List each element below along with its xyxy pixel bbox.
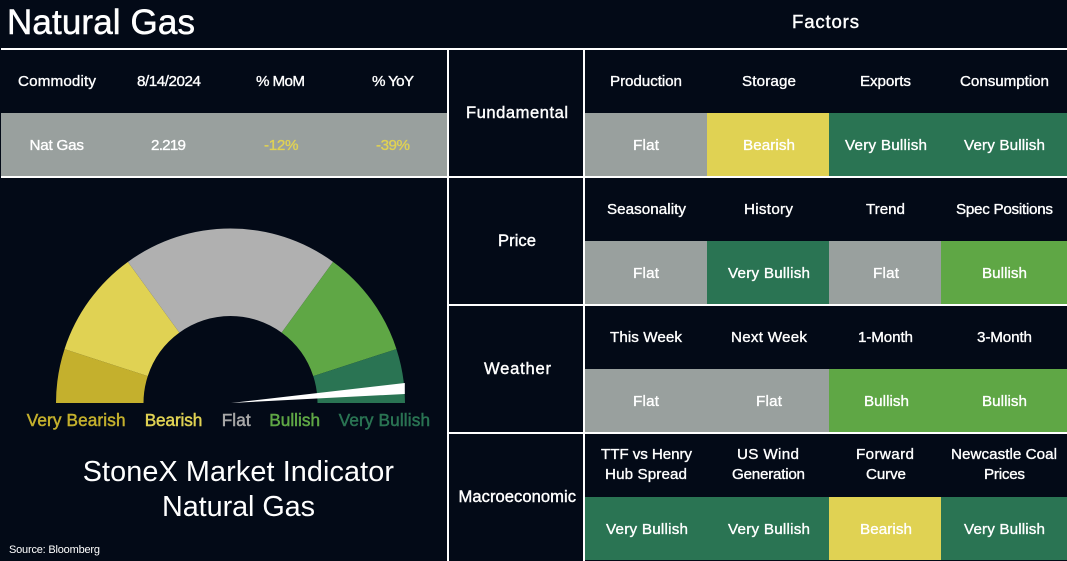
status text: Very Bullish (728, 521, 810, 538)
panel: commodity price table (1, 73, 447, 176)
status text: Flat (756, 393, 783, 410)
factor name line 2: Curve (866, 466, 906, 483)
table row background (1, 113, 447, 176)
factor name line 1: US Wind (737, 446, 799, 463)
panel: weather factors (484, 329, 1067, 432)
factor name: Seasonality (607, 201, 686, 218)
factor name: Exports (860, 73, 911, 90)
status cell: three month bullish (941, 369, 1067, 432)
status text: Very Bullish (964, 137, 1045, 154)
status cell: history very bullish (707, 241, 829, 304)
status text: Bearish (860, 521, 912, 538)
row label: Weather (484, 359, 551, 378)
gauge caption line 2: Natural Gas (162, 491, 315, 523)
panel: price factors (498, 201, 1067, 304)
status text: Very Bullish (728, 265, 810, 282)
status cell: exports very bullish (829, 113, 941, 176)
table header: commodity: Commodity (18, 73, 96, 90)
status text: Flat (633, 265, 660, 282)
legend: very bearish: Very Bearish (27, 410, 126, 430)
panel: macroeconomic factors (458, 446, 1067, 560)
status cell: coal very bullish (941, 497, 1067, 560)
month over month value: -12% (264, 137, 298, 154)
title: Natural Gas (7, 3, 195, 42)
status cell: one month bullish (829, 369, 941, 432)
legend: bullish: Bullish (269, 410, 320, 430)
factor name: Next Week (731, 329, 807, 346)
factor name: Consumption (960, 73, 1049, 90)
year over year value: -39% (376, 137, 410, 154)
status cell: consumption very bullish (941, 113, 1067, 176)
gauge segment: bullish (282, 262, 396, 376)
commodity name: Nat Gas (30, 137, 84, 154)
gauge caption line 1: StoneX Market Indicator (83, 456, 394, 488)
status text: Bearish (743, 137, 795, 154)
factor name: History (744, 201, 793, 218)
row label: Price (498, 231, 536, 250)
gauge segment: very bullish (313, 349, 405, 403)
row label: Macroeconomic (458, 487, 576, 506)
status text: Flat (633, 393, 660, 410)
heading: factors: Factors (792, 11, 859, 32)
factor name line 2: Prices (984, 466, 1025, 483)
panel: market indicator gauge (9, 229, 430, 556)
gauge segment: bearish (65, 262, 179, 376)
status cell: trend flat (829, 241, 941, 304)
factor name line 1: Forward (856, 446, 914, 463)
price value: 2.219 (151, 137, 186, 154)
factor name line 1: TTF vs Henry (601, 446, 692, 463)
source note: Source: Bloomberg (9, 544, 100, 556)
factor name: 3-Month (977, 329, 1032, 346)
status cell: this week flat (585, 369, 707, 432)
factor name: 1-Month (858, 329, 913, 346)
status cell: spec positions bullish (941, 241, 1067, 304)
status cell: production flat (585, 113, 707, 176)
gauge segment: very bearish (56, 349, 148, 403)
factor name: Production (610, 73, 682, 90)
status cell: next week flat (707, 369, 829, 432)
status text: Very Bullish (845, 137, 927, 154)
legend: flat: Flat (222, 410, 251, 430)
table header: month over month: % MoM (256, 73, 305, 90)
factor name: Spec Positions (956, 201, 1053, 218)
factor name: Trend (866, 201, 905, 218)
table header: date: 8/14/2024 (137, 73, 201, 90)
status text: Very Bullish (606, 521, 688, 538)
factor name line 1: Newcastle Coal (951, 446, 1057, 463)
factor name: Storage (742, 73, 796, 90)
status text: Bullish (982, 393, 1027, 410)
status cell: storage bearish (707, 113, 829, 176)
legend: very bullish: Very Bullish (339, 410, 430, 430)
panel: fundamental factors (466, 73, 1067, 176)
row label: Fundamental (466, 103, 568, 122)
table header: year over year: % YoY (372, 73, 414, 90)
status text: Flat (873, 265, 900, 282)
factor name: This Week (610, 329, 682, 346)
status text: Bullish (864, 393, 909, 410)
status text: Bullish (982, 265, 1027, 282)
factor name line 2: Hub Spread (605, 466, 687, 483)
gauge needle (231, 383, 405, 403)
status text: Very Bullish (964, 521, 1045, 538)
gauge segment: flat (128, 229, 333, 333)
status text: Flat (633, 137, 660, 154)
status cell: forward curve bearish (829, 497, 941, 560)
status cell: seasonality flat (585, 241, 707, 304)
factor name line 2: Generation (732, 466, 805, 483)
legend: bearish: Bearish (145, 410, 202, 430)
status cell: spread very bullish (585, 497, 707, 560)
status cell: wind very bullish (707, 497, 829, 560)
